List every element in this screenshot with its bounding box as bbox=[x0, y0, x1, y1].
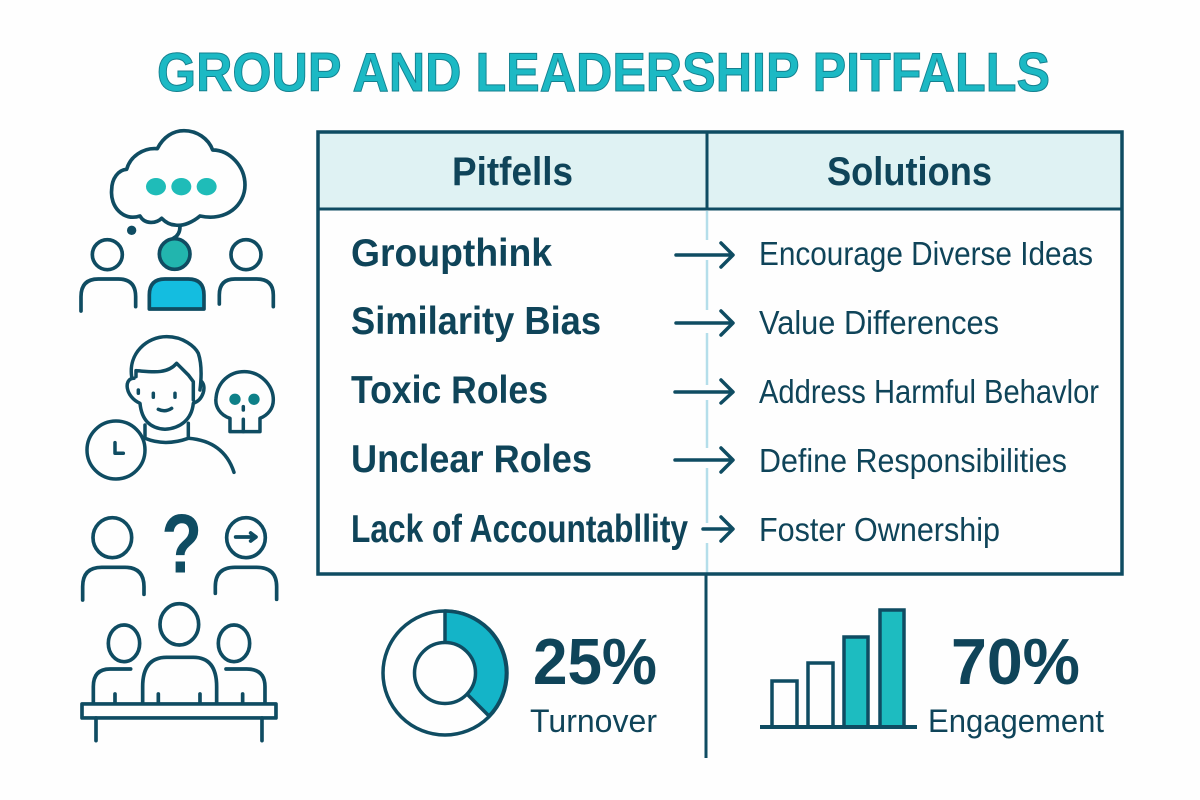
solution list: Define Responsibilities bbox=[759, 442, 1067, 479]
person bbox=[127, 337, 234, 472]
stat: 25% turnover bbox=[530, 625, 657, 739]
icon: person with clock and skull bbox=[87, 337, 273, 479]
stat: 25% turnover: 25% bbox=[533, 625, 657, 698]
right person bbox=[218, 625, 265, 703]
column divider light bbox=[706, 211, 708, 573]
stat: 70% engagement: 70% bbox=[951, 625, 1080, 698]
table frame bbox=[318, 132, 1122, 574]
stat: engagement bar chart bbox=[760, 610, 917, 727]
solution list: Address Harmful Behavlor bbox=[759, 373, 1099, 410]
stat: turnover donut chart bbox=[383, 611, 507, 735]
cloud dots bbox=[146, 178, 217, 195]
icon: groupthink team with thought cloud bbox=[81, 131, 273, 311]
stats divider bbox=[704, 575, 708, 758]
table: pitfalls and solutions bbox=[318, 132, 1122, 574]
header: pitfalls: Pitfells bbox=[452, 150, 573, 194]
thought bubble tail bbox=[127, 226, 180, 238]
center highlighted person bbox=[149, 239, 204, 309]
clock bbox=[87, 421, 145, 479]
right person with arrow head bbox=[215, 518, 277, 599]
solution list: Foster Ownership bbox=[759, 511, 1000, 548]
title: GROUP AND LEADERSHIP PITFALLS bbox=[157, 41, 1050, 103]
thought cloud bbox=[112, 131, 245, 225]
table header background bbox=[318, 132, 1122, 209]
solution list: Encourage Diverse Ideas bbox=[759, 235, 1093, 272]
solution list: Value Differences bbox=[759, 304, 999, 341]
left person bbox=[93, 625, 140, 703]
pitfall list: Toxic Roles bbox=[351, 369, 548, 412]
solution list bbox=[759, 235, 1099, 548]
question mark: ? bbox=[161, 498, 202, 591]
header: solutions: Solutions bbox=[827, 150, 992, 194]
pitfall list: Lack of Accountabllity bbox=[351, 508, 688, 551]
skull bbox=[216, 372, 273, 432]
center person bbox=[143, 604, 217, 703]
table bbox=[82, 694, 276, 741]
arrows bbox=[675, 243, 733, 541]
pitfall list: Groupthink bbox=[351, 232, 552, 275]
stat: 25% turnover: Turnover bbox=[530, 703, 657, 739]
left person bbox=[81, 240, 136, 311]
left person bbox=[83, 518, 144, 600]
pitfall list: Unclear Roles bbox=[351, 438, 592, 481]
icon: unclear roles people with question mark bbox=[83, 498, 277, 600]
pitfall list: Similarity Bias bbox=[351, 300, 601, 343]
pitfall list bbox=[351, 232, 688, 551]
stat: 70% engagement bbox=[928, 625, 1104, 739]
stat: 70% engagement: Engagement bbox=[928, 703, 1104, 739]
right person bbox=[219, 240, 273, 307]
icon: team at table bbox=[82, 604, 276, 741]
